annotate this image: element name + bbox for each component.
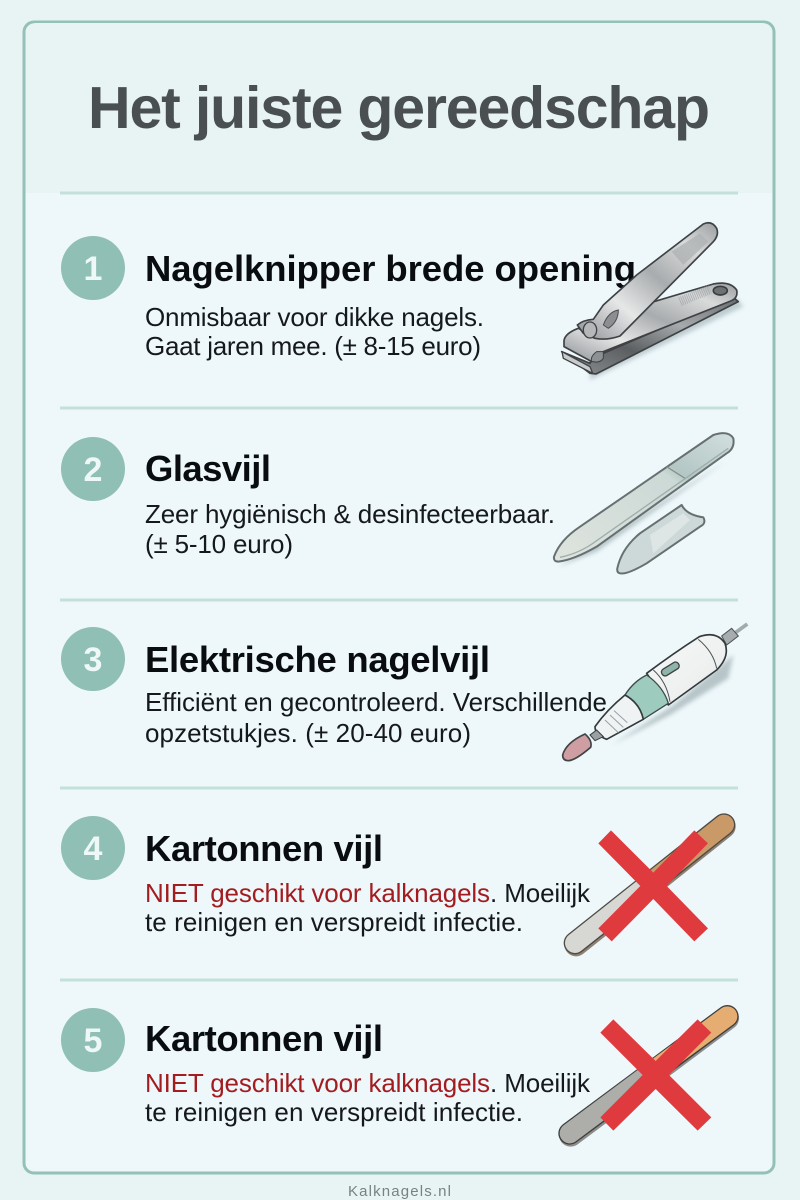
heading 2: Glasvijl bbox=[145, 448, 271, 489]
icon: crossed-out emery board bbox=[570, 1016, 727, 1135]
description 3: Efficiënt en gecontroleerd. Verschillende bbox=[145, 687, 607, 717]
number badge 2 bbox=[61, 437, 125, 501]
description 4: . Moeilijk bbox=[490, 878, 591, 908]
description 5: NIET geschikt voor kalknagels bbox=[145, 1068, 490, 1098]
icon: electric nail file bbox=[563, 624, 747, 761]
description 2: (± 5-10 euro) bbox=[145, 529, 293, 559]
icon: nail clipper bbox=[562, 223, 743, 380]
number badge 2: 2 bbox=[84, 451, 102, 489]
emery board bbox=[575, 825, 724, 945]
number badge 1: 1 bbox=[84, 250, 102, 288]
number badge 4 bbox=[61, 816, 125, 880]
panel: item 4 kartonnen vijl bbox=[61, 816, 724, 945]
description 1: Onmisbaar voor dikke nagels. bbox=[145, 302, 484, 332]
heading 3: Elektrische nagelvijl bbox=[145, 639, 490, 680]
description 3 bbox=[145, 687, 607, 748]
description 3: opzetstukjes. (± 20-40 euro) bbox=[145, 718, 471, 748]
panel: item 2 glasvijl bbox=[61, 433, 738, 574]
footer source: Kalknagels.nl bbox=[348, 1183, 451, 1200]
description 1: Gaat jaren mee. (± 8-15 euro) bbox=[145, 331, 481, 361]
heading 4: Kartonnen vijl bbox=[145, 828, 383, 869]
icon: glass nail file bbox=[554, 433, 738, 574]
description 5: . Moeilijk bbox=[490, 1068, 591, 1098]
number badge 3 bbox=[61, 627, 125, 691]
title: Het juiste gereedschap bbox=[88, 75, 710, 141]
description 2 bbox=[145, 499, 555, 559]
description 5 bbox=[145, 1068, 591, 1127]
number badge 4: 4 bbox=[84, 830, 103, 868]
icon: crossed-out emery board bbox=[575, 825, 724, 945]
panel: item 5 kartonnen vijl bbox=[61, 1008, 727, 1135]
description 2: Zeer hygiënisch & desinfecteerbaar. bbox=[145, 499, 555, 529]
description 4 bbox=[145, 878, 591, 937]
number badge 5: 5 bbox=[84, 1022, 102, 1060]
number badge 3: 3 bbox=[84, 641, 102, 679]
description 4: te reinigen en verspreidt infectie. bbox=[145, 907, 523, 937]
heading 1: Nagelknipper brede opening bbox=[145, 248, 636, 289]
description 4: NIET geschikt voor kalknagels bbox=[145, 878, 490, 908]
number badge 1 bbox=[61, 236, 125, 300]
description 5: te reinigen en verspreidt infectie. bbox=[145, 1097, 523, 1127]
emery board bbox=[570, 1016, 727, 1135]
number badge 5 bbox=[61, 1008, 125, 1072]
red cross bbox=[598, 830, 708, 941]
panel: item 3 elektrische nagelvijl bbox=[61, 624, 747, 761]
description 1 bbox=[145, 302, 484, 361]
panel: item 1 nagelknipper bbox=[61, 223, 743, 380]
heading 5: Kartonnen vijl bbox=[145, 1018, 383, 1059]
red cross bbox=[600, 1019, 711, 1131]
